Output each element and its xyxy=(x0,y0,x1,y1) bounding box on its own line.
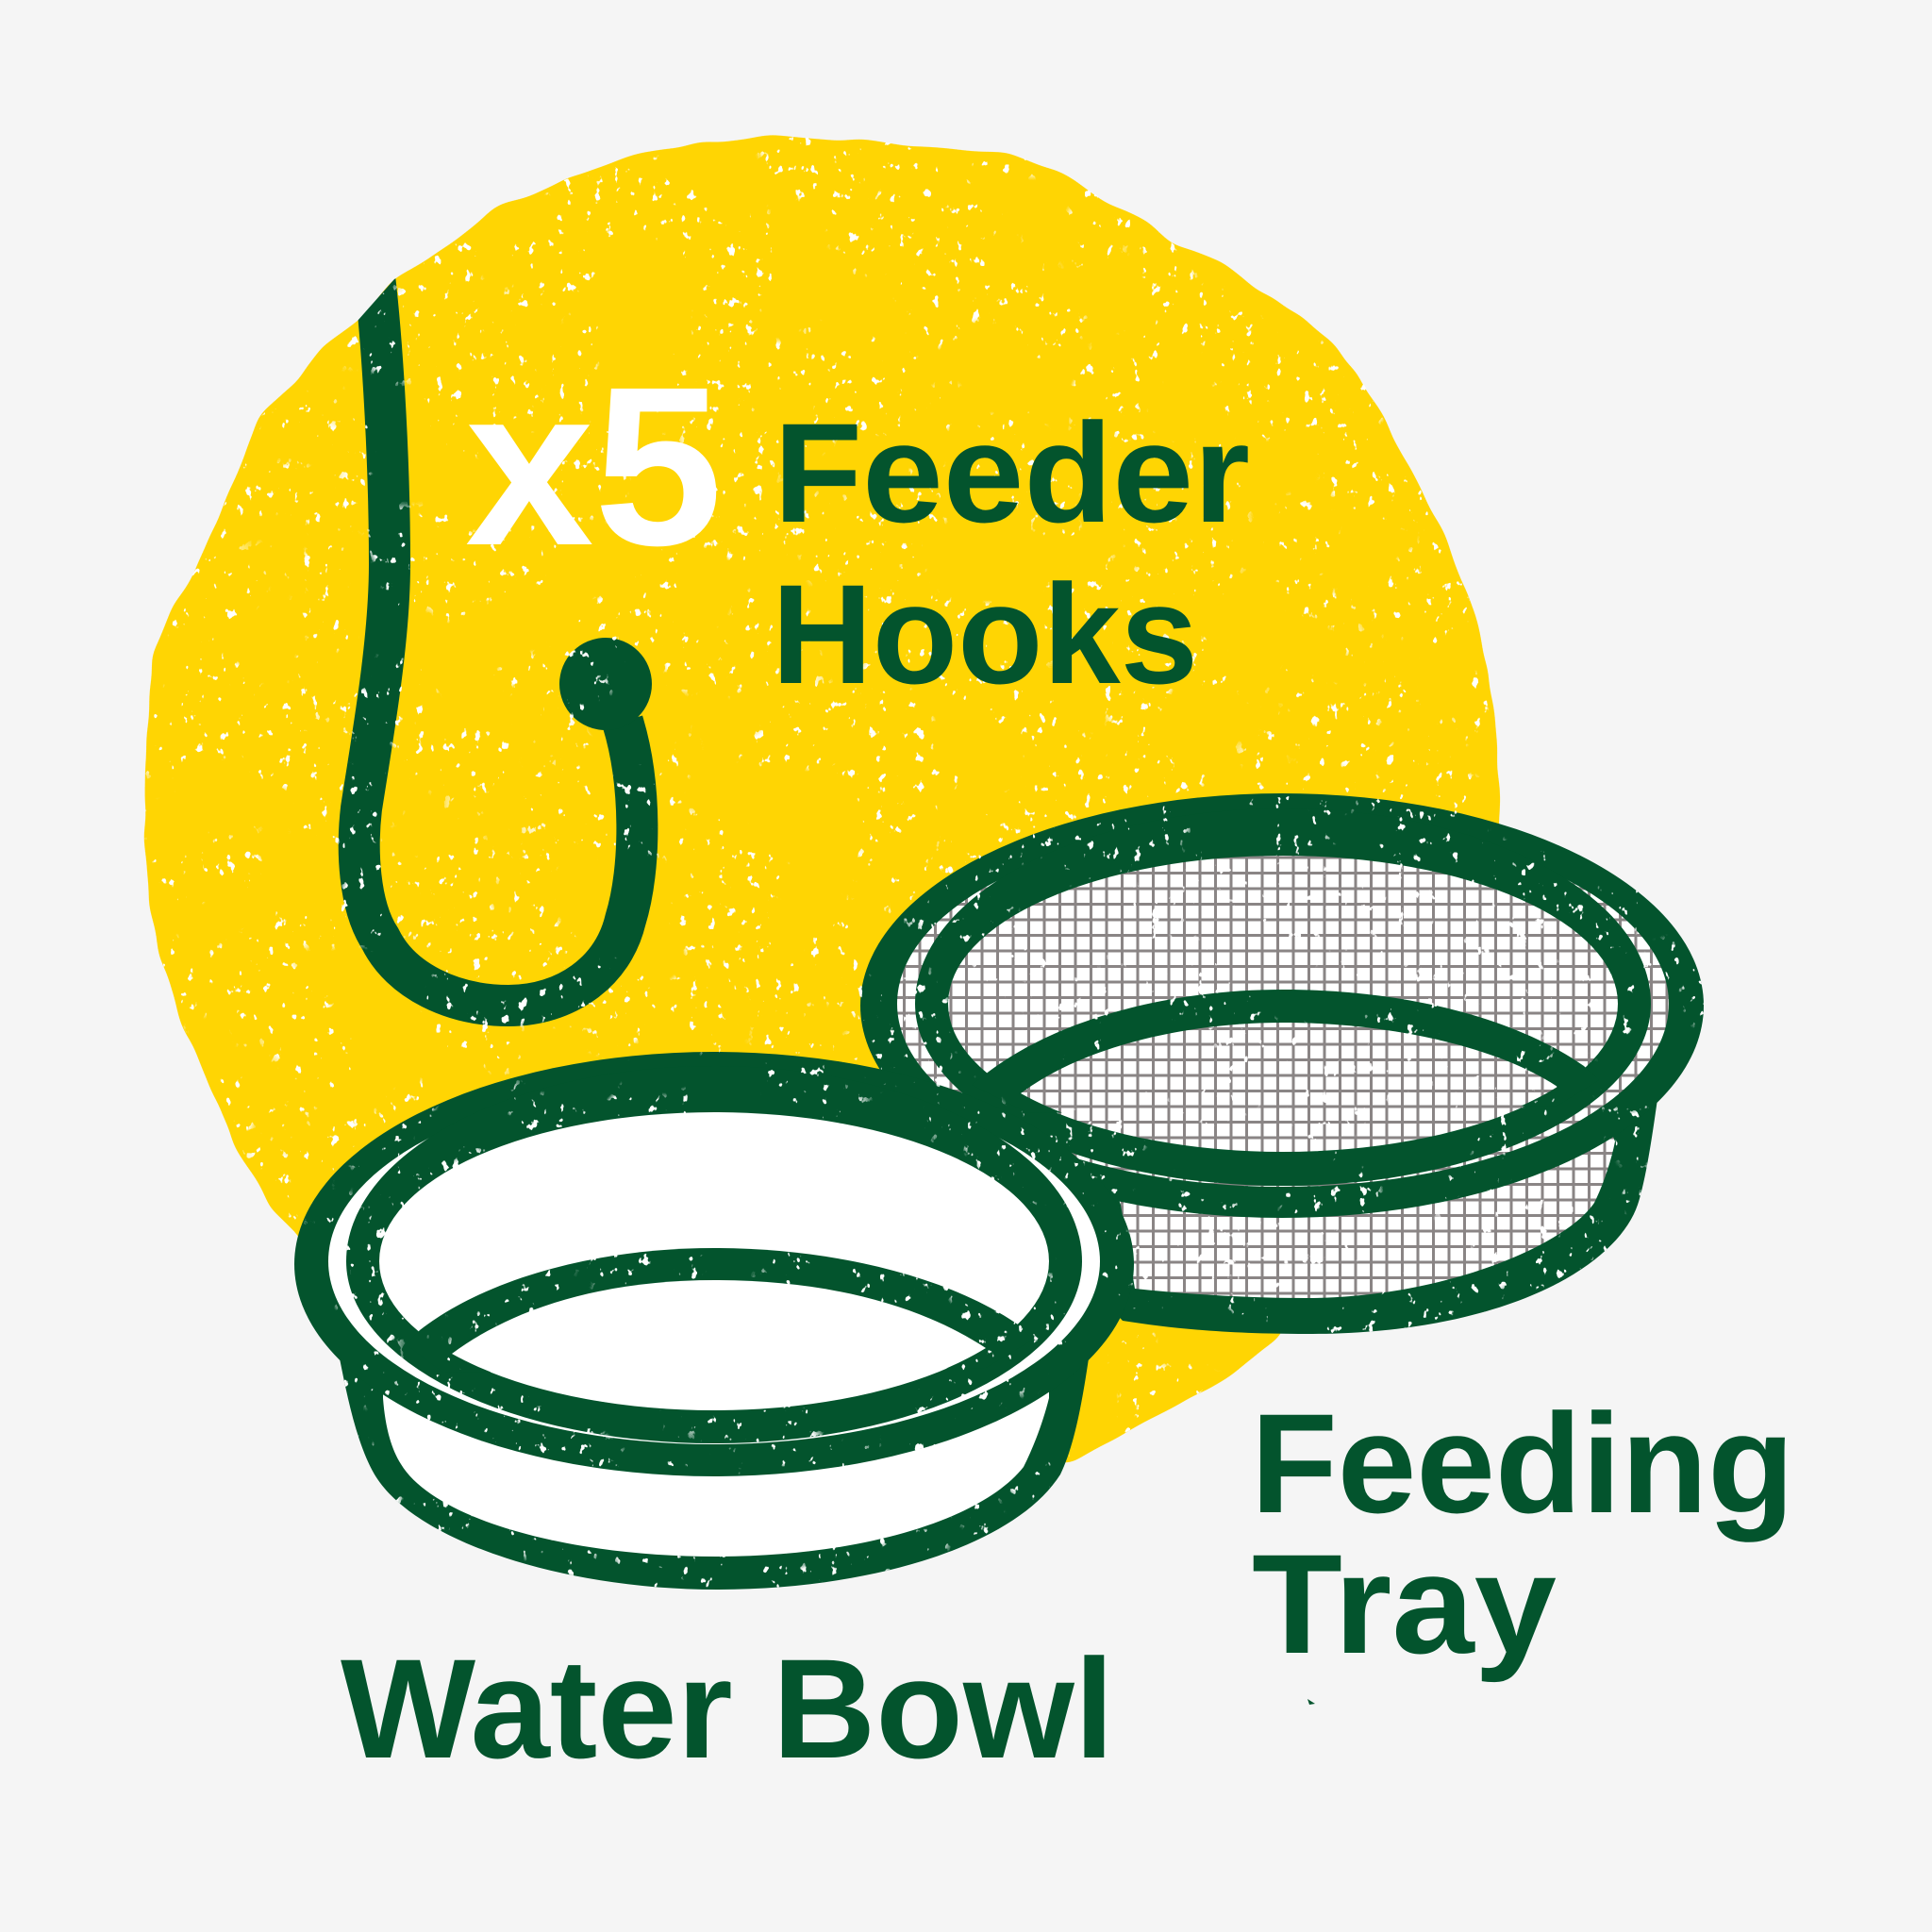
icon: feeder hook xyxy=(359,255,652,1006)
icon: feeding tray xyxy=(860,793,1704,1334)
distressed speckle texture xyxy=(144,137,1704,1587)
heading: Feeding Tray xyxy=(1251,1384,1794,1683)
heading: Water Bowl: Water Bowl xyxy=(341,1629,1114,1788)
yellow textured blob xyxy=(144,136,1500,1462)
heading: Feeder Hooks: Hooks xyxy=(772,555,1198,713)
illustration: feeder kit contents xyxy=(143,135,1785,1758)
heading: Feeding Tray: Tray xyxy=(1252,1524,1557,1683)
quantity label: x5: x5 xyxy=(465,340,723,592)
icon: water bowl xyxy=(294,1052,1134,1590)
stray ink fleck xyxy=(1307,1699,1315,1705)
heading: Feeder Hooks xyxy=(772,393,1250,713)
heading: Feeder Hooks: Feeder xyxy=(774,393,1250,552)
heading: Feeding Tray: Feeding xyxy=(1251,1384,1794,1542)
